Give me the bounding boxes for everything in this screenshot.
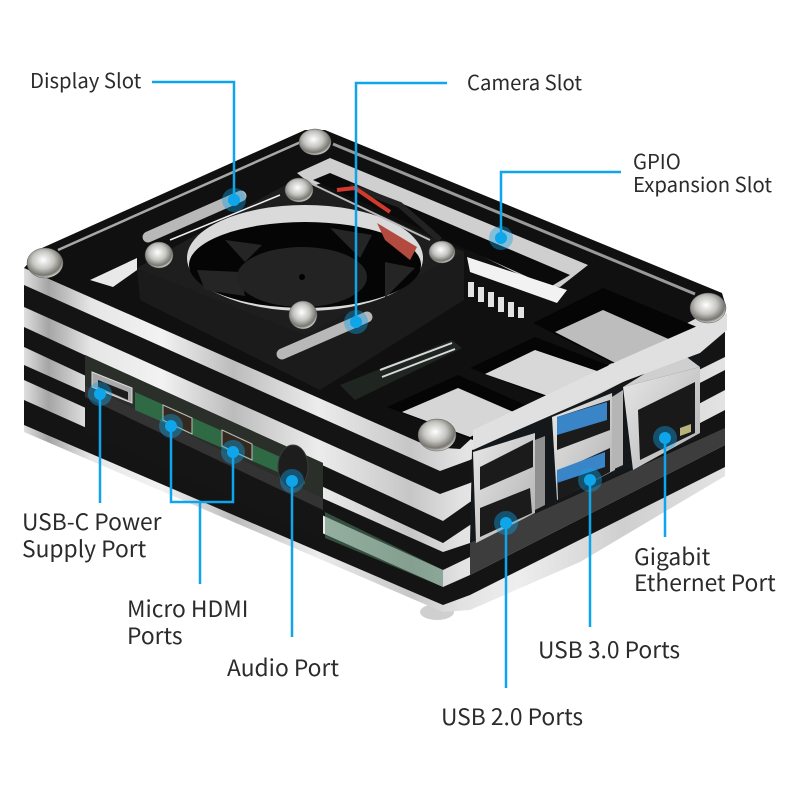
- black layers: [24, 285, 725, 605]
- green tinted clear layer: [325, 512, 443, 587]
- callout: Audio Port: Audio Port: [227, 650, 339, 683]
- callout: Micro HDMI Ports: Micro HDMI: [127, 591, 248, 624]
- micro HDMI connectors: [163, 405, 252, 460]
- callout: Gigabit Ethernet Port: [634, 426, 776, 598]
- callout: USB 2.0 Ports: USB 2.0 Ports: [441, 699, 583, 732]
- callout: Display Slot: Display Slot: [30, 64, 142, 94]
- callout: Gigabit Ethernet Port: Gigabit: [634, 539, 711, 572]
- display slot: [148, 196, 241, 237]
- case side clear layers: [24, 268, 725, 612]
- top plate edge highlight: [58, 141, 303, 250]
- callout: Gigabit Ethernet Port: Ethernet Port: [634, 565, 776, 598]
- port windows in top plate: [387, 288, 697, 440]
- USB 2.0 block: [473, 433, 545, 543]
- GPIO pins: [468, 282, 524, 318]
- fan: [137, 178, 464, 390]
- callout: USB-C Power Supply Port: Supply Port: [22, 531, 147, 564]
- callout: Camera Slot: [344, 66, 582, 334]
- port opening background: [470, 350, 700, 543]
- screws: [27, 129, 726, 451]
- callout: USB-C Power Supply Port: [22, 382, 162, 564]
- callout: USB 3.0 Ports: [538, 468, 680, 665]
- callout: GPIO Expansion Slot: GPIO: [633, 145, 681, 175]
- callout: USB 3.0 Ports: USB 3.0 Ports: [538, 632, 680, 665]
- GPIO slot frame: [297, 158, 588, 303]
- callout: USB-C Power Supply Port: USB-C Power: [22, 504, 162, 537]
- camera slot: [282, 317, 367, 354]
- audio jack: [278, 445, 308, 489]
- case illustration: [24, 129, 727, 620]
- Ethernet block: [623, 352, 700, 470]
- diagonal clear bar: [473, 313, 727, 450]
- callout: Camera Slot: Camera Slot: [467, 66, 582, 96]
- callout: USB 2.0 Ports: [441, 511, 583, 732]
- rubber feet: [30, 421, 721, 620]
- callout: GPIO Expansion Slot: Expansion Slot: [633, 168, 772, 198]
- USB 3.0 block: [552, 390, 623, 500]
- callout: GPIO Expansion Slot: [489, 145, 772, 250]
- left port window: [85, 355, 443, 587]
- callout: Micro HDMI Ports: [127, 414, 248, 651]
- callout: Audio Port: [227, 469, 339, 683]
- translucent layer under right ports: [470, 428, 725, 575]
- ribbon connector: [340, 340, 462, 400]
- callout: Micro HDMI Ports: Ports: [127, 618, 182, 651]
- callout: Display Slot: [30, 64, 246, 212]
- white opening by fan: [90, 258, 137, 287]
- USB-C connector: [92, 372, 132, 403]
- top plate: [24, 130, 725, 449]
